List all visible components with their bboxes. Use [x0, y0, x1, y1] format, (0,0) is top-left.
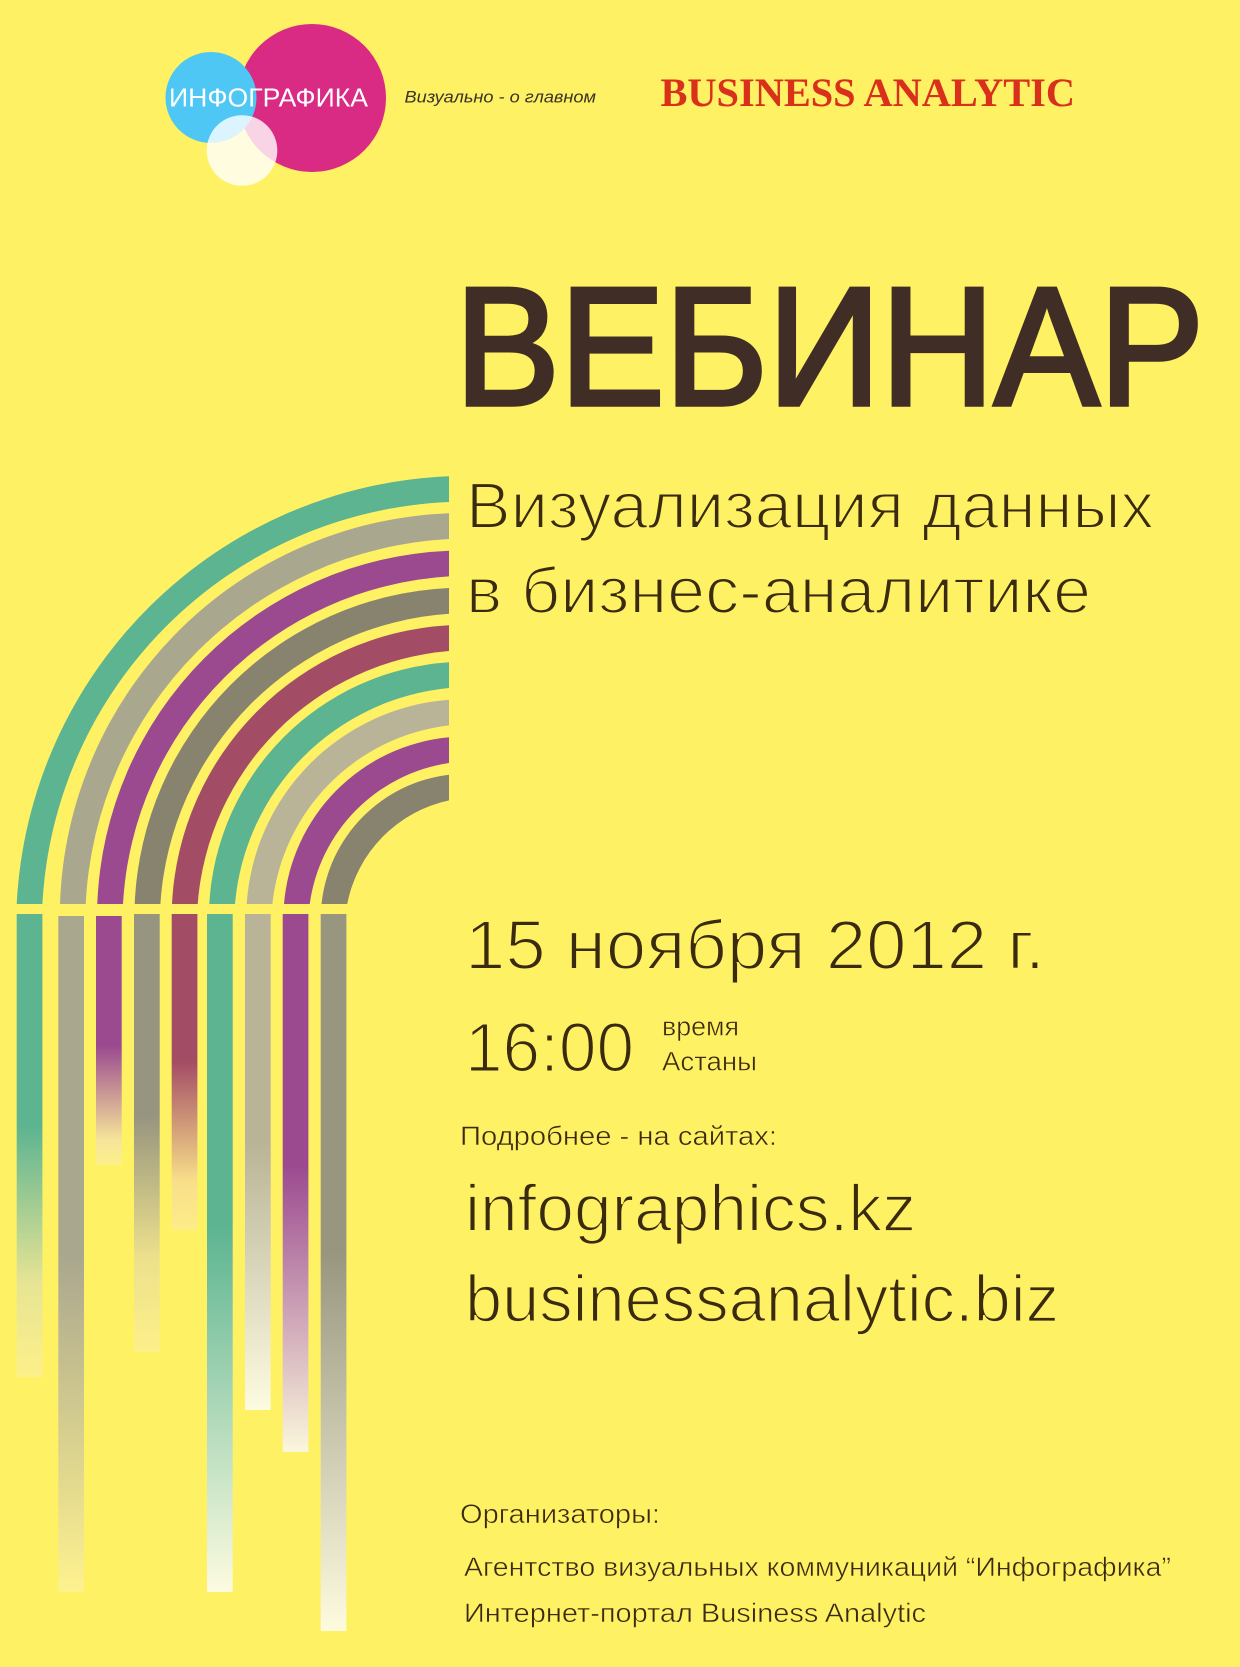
logo: Инфографика	[166, 24, 386, 186]
organizers	[460, 1499, 1171, 1628]
organizers heading: Организаторы:	[460, 1499, 660, 1529]
logo wordmark: ИНФОГРАФИКА	[169, 83, 369, 113]
logo circle: pink	[238, 24, 386, 172]
organizer 1: Агентство визуальных коммуникаций “Инфографика”	[464, 1552, 1171, 1582]
logo circle: blue	[166, 52, 256, 143]
time zone line 1: время	[662, 1012, 739, 1042]
partner name: Business Analytic: BUSINESS ANALYTIC	[660, 70, 1075, 115]
arc band 4	[135, 588, 449, 904]
bar 3	[96, 916, 122, 1165]
website 1: infographics.kz	[465, 1171, 916, 1245]
logo circle: translucent white	[207, 115, 277, 186]
arcs: nine concentric rainbow bands	[17, 476, 449, 904]
details label: Подробнее - на сайтах:	[460, 1121, 777, 1151]
arc band 7	[247, 700, 449, 904]
bar 1	[17, 914, 42, 1377]
time: 16:00	[465, 1009, 634, 1087]
websites	[465, 1171, 1059, 1336]
subtitle line 1: Визуализация данных	[466, 469, 1154, 542]
date: 15 ноября 2012 г.	[465, 906, 1045, 984]
subtitle	[466, 469, 1154, 627]
fading vertical bars	[17, 914, 346, 1631]
bar 5	[172, 914, 197, 1230]
bar 7	[245, 914, 271, 1410]
logo tagline: Визуально - о главном	[404, 87, 596, 106]
arc band 1	[17, 476, 449, 904]
arc band 5	[172, 625, 449, 904]
arc band 9	[322, 775, 449, 904]
subtitle line 2: в бизнес-аналитике	[466, 554, 1091, 627]
time zone line 2: Астаны	[662, 1047, 757, 1077]
bar 6	[207, 914, 233, 1592]
organizer 2: Интернет-портал Business Analytic	[464, 1598, 926, 1628]
bar 8	[283, 914, 308, 1452]
bar 9	[321, 914, 346, 1631]
bar 4	[134, 914, 160, 1352]
title: Вебинар: ВЕБИНАР	[455, 252, 1204, 440]
website 2: businessanalytic.biz	[465, 1262, 1059, 1336]
bar 2	[58, 916, 84, 1592]
arc band 3	[97, 551, 449, 904]
arc band 8	[284, 737, 449, 904]
arc band 2	[60, 513, 449, 904]
arc band 6	[209, 662, 449, 904]
time zone note	[662, 1012, 757, 1077]
